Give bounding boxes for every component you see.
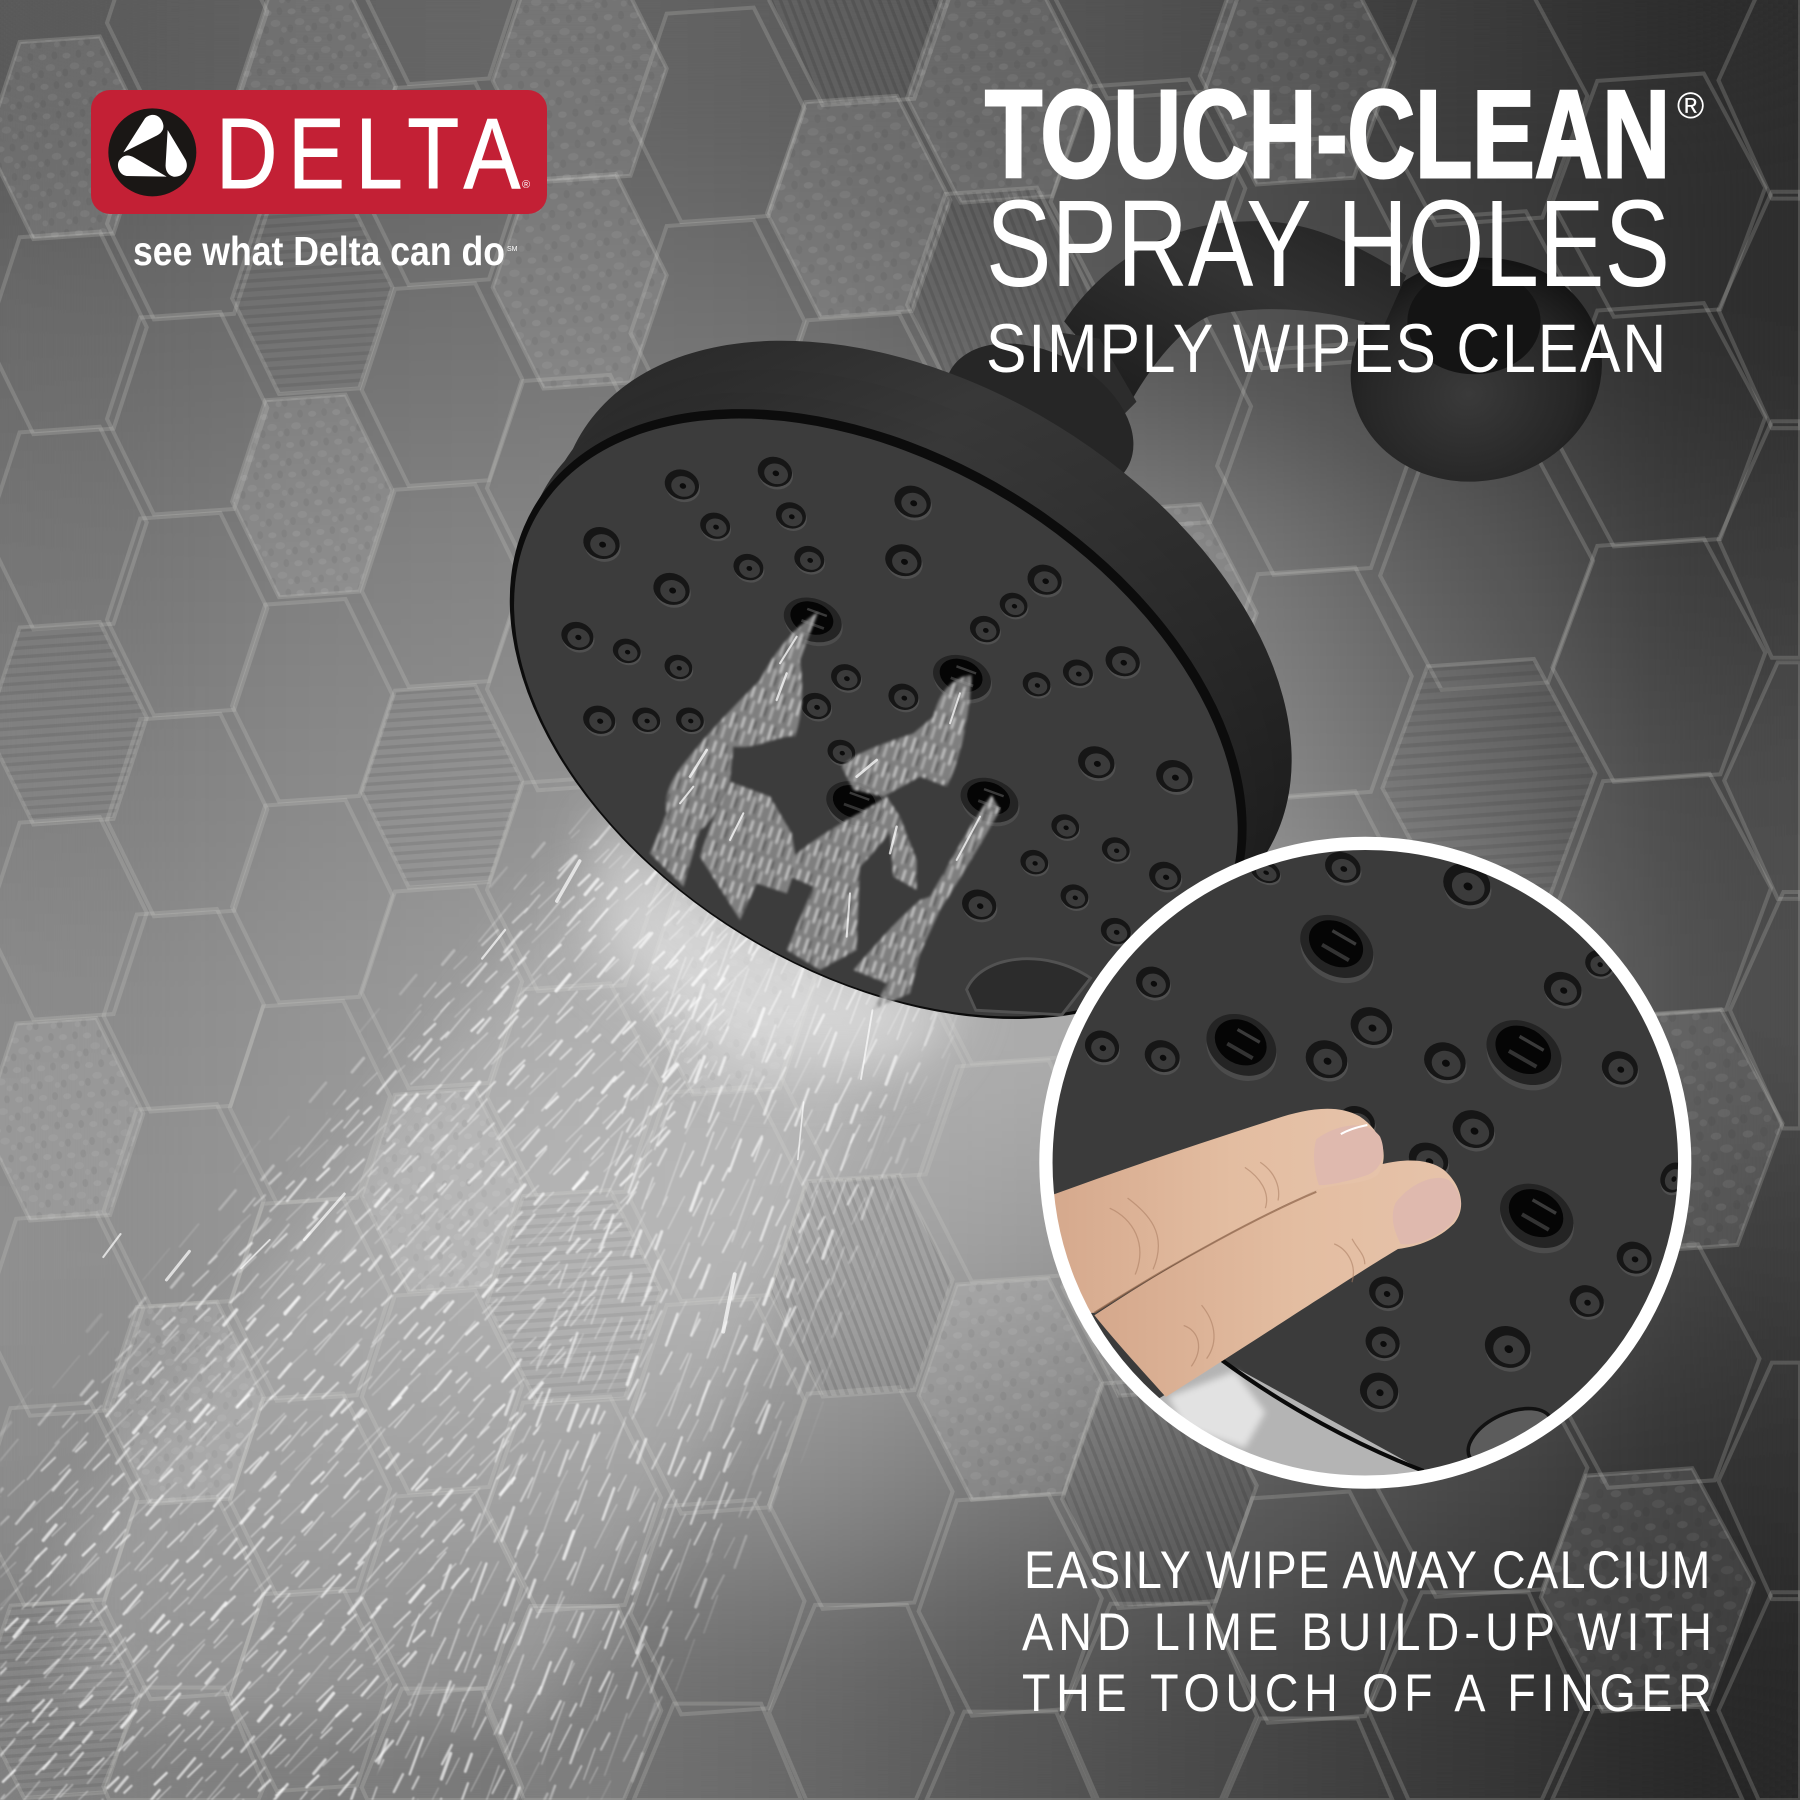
threaded neck [1062,333,1136,436]
caption: EASILY WIPE AWAY CALCIUM [1024,1540,1710,1600]
tagline: SM [507,246,518,253]
logo badge [91,90,547,214]
water spray [0,792,987,1800]
tile seen below the face [1160,1362,1418,1476]
shower arm and wall flange [1062,221,1623,505]
jet bodies [650,612,1000,1010]
selector button [1466,1406,1550,1458]
red badge [91,90,547,214]
inset photo content [1052,850,1678,1476]
subtitle: SIMPLY WIPES CLEAN [986,309,1666,387]
spray haze [69,872,895,1722]
brand wordmark: DELTA [216,97,520,210]
inset nozzles [1079,846,1693,1419]
caption [1022,1540,1712,1723]
tagline: see what Delta can do [133,228,505,274]
upper finger [1046,1109,1384,1315]
inset circle: finger wiping spray holes [1031,831,1704,1504]
nozzles [557,452,1199,951]
flange [1330,234,1623,505]
spray streaks [0,792,987,1800]
bright water sheet below the head [597,804,964,1068]
loose droplets [103,861,872,1332]
caption: AND LIME BUILD-UP WITH [1022,1602,1712,1662]
lower finger [1094,1160,1461,1397]
water jets from the face [650,612,1000,1010]
jet highlights [680,637,980,937]
title: touch-clean: ® [1677,85,1704,126]
head collar [918,313,1159,525]
caption: THE TOUCH OF A FINGER [1022,1663,1712,1723]
head body drum [414,216,1400,1122]
icon: delta emblem [108,108,196,196]
selector button [967,959,1091,1015]
arm [1064,221,1406,402]
shower head [400,216,1400,1145]
registered mark: ® [522,179,530,191]
inset white ring [1046,843,1685,1482]
face rim [1222,1360,1423,1471]
spray face [400,283,1356,1145]
